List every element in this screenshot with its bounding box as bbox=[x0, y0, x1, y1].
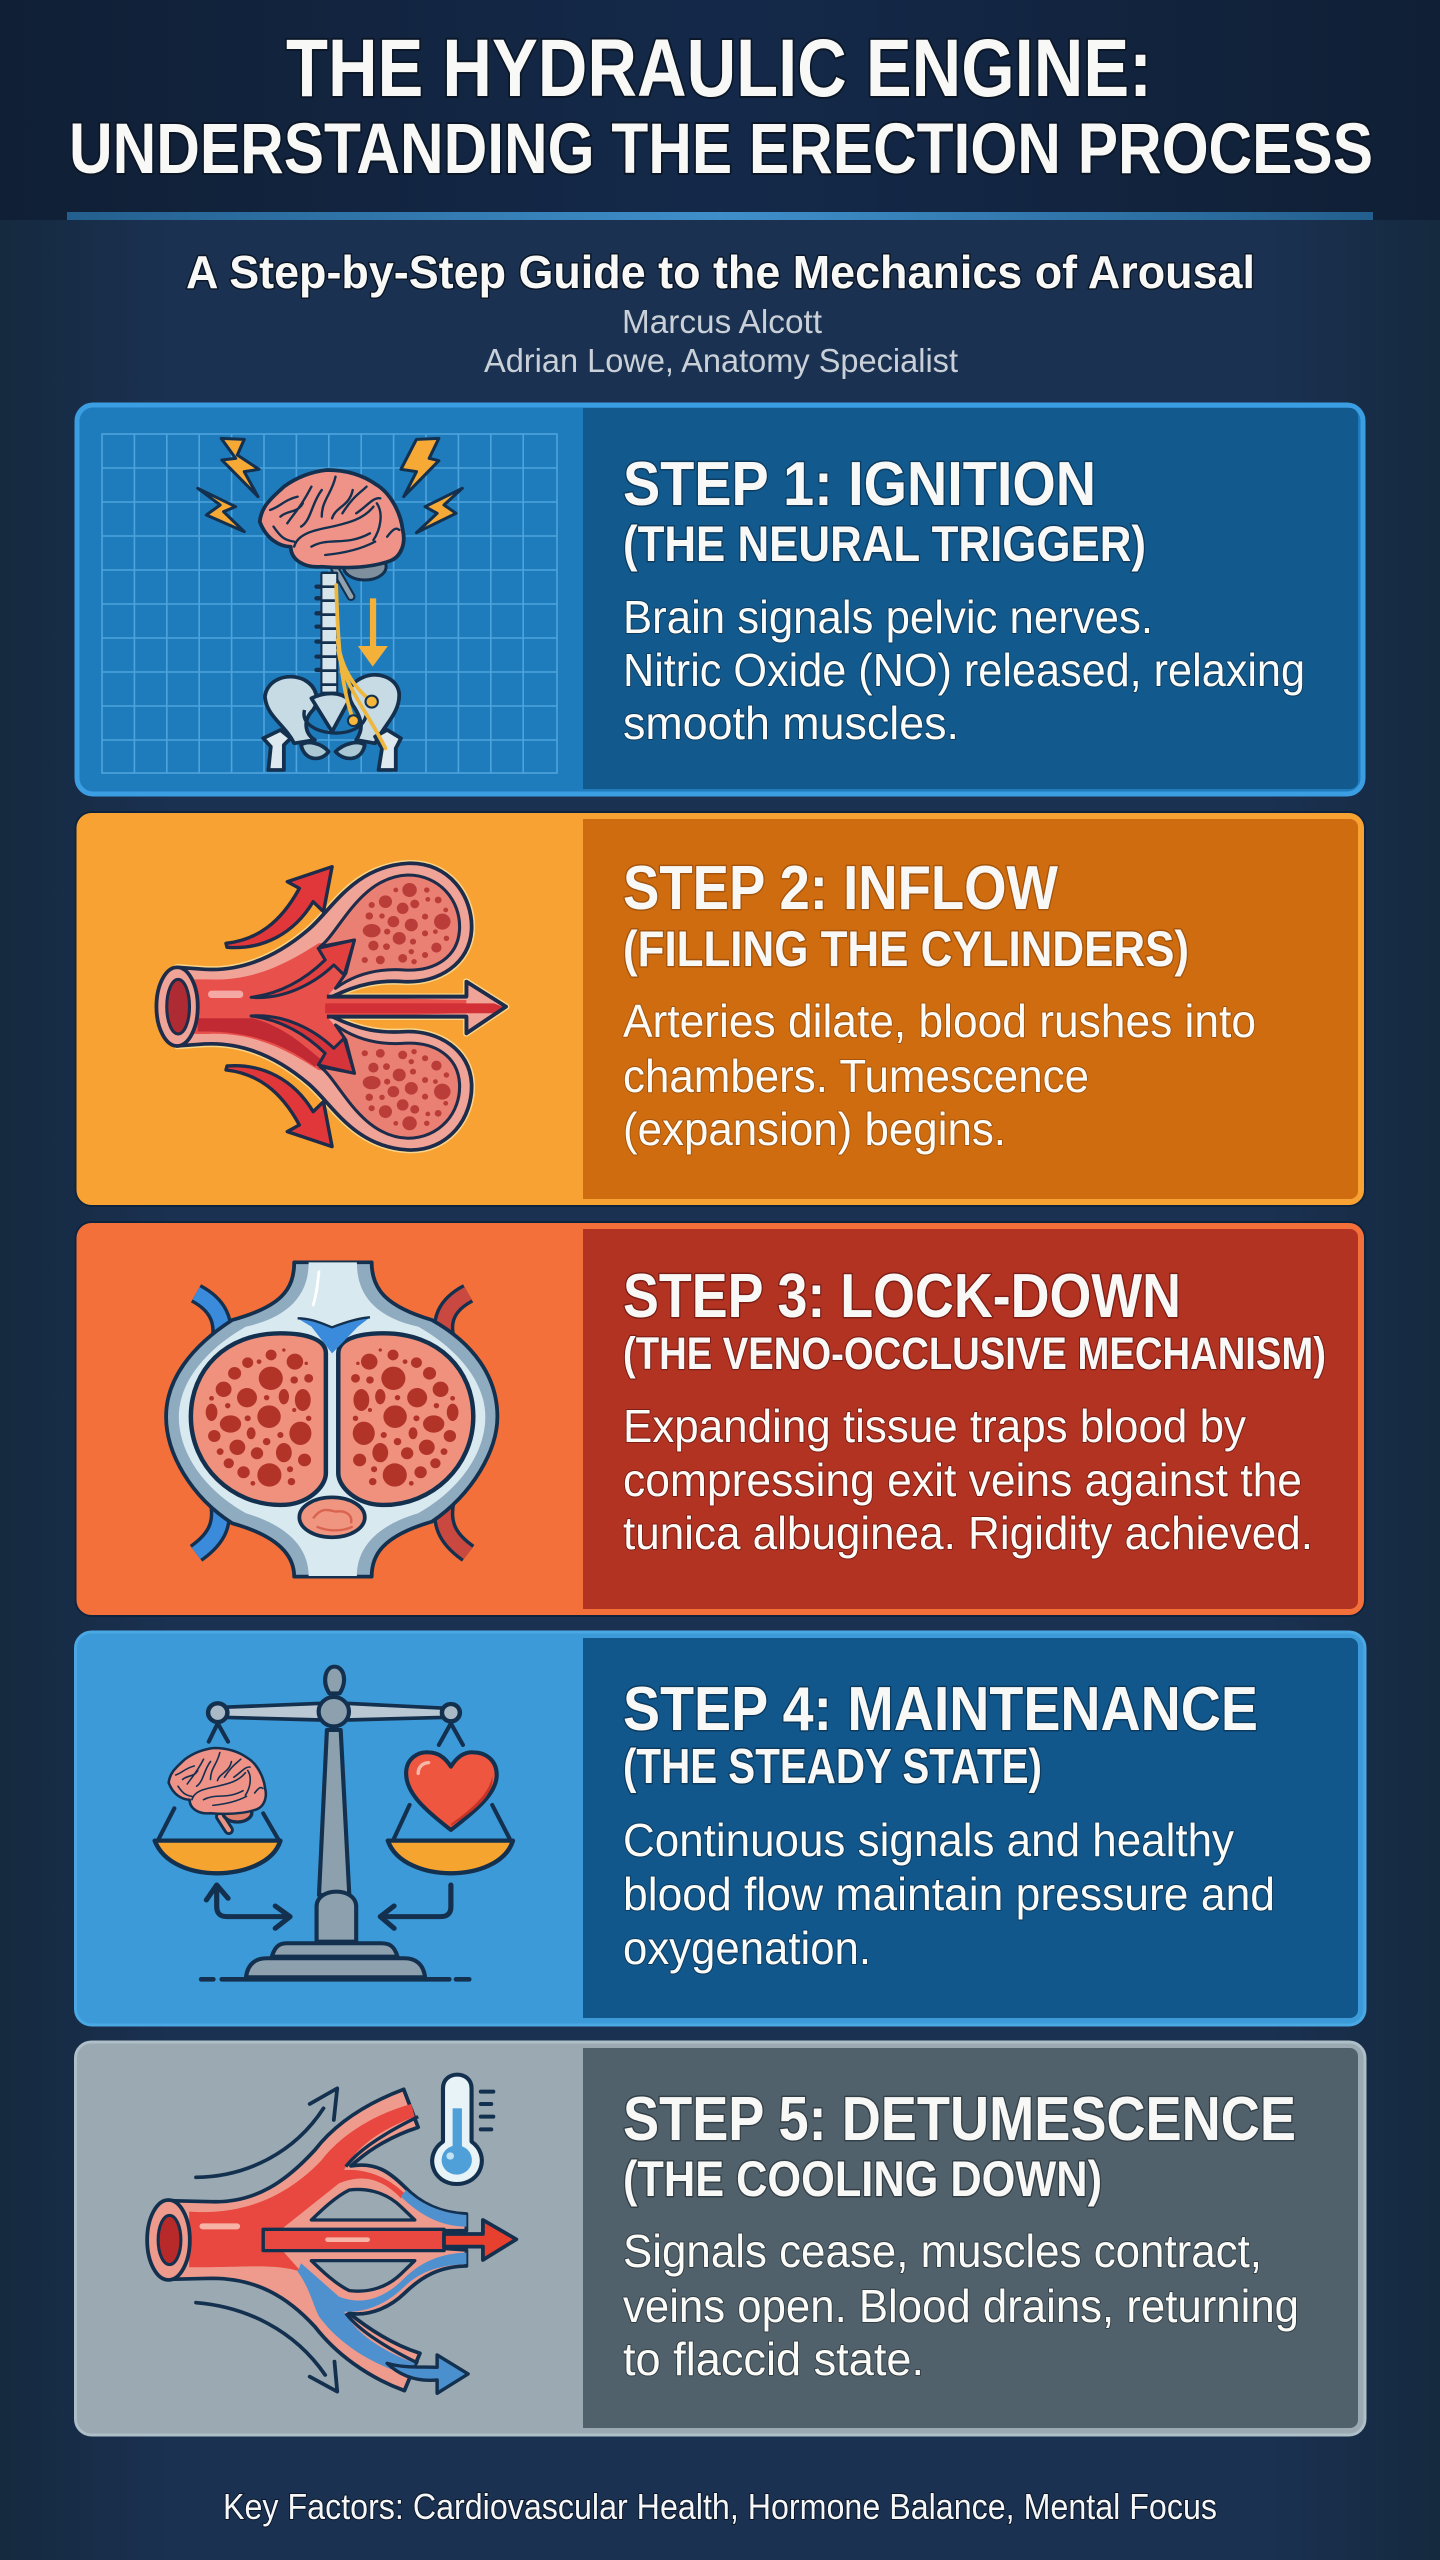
icon: heart bbox=[406, 1752, 497, 1830]
text: step 4 bbox=[623, 1675, 1275, 1974]
text: step 5 bbox=[623, 2085, 1299, 2385]
footer: key factors: Key Factors: Cardiovascular Health, Hormone Balance, Mental Focus bbox=[223, 2486, 1217, 2527]
vessel silhouette bbox=[170, 2089, 466, 2391]
pelvis bbox=[263, 675, 401, 770]
text: step 4: oxygenation. bbox=[623, 1922, 871, 1974]
text: step 4: Continuous signals and healthy bbox=[623, 1814, 1234, 1866]
red flow bbox=[189, 2104, 444, 2272]
text: step 5: veins open. Blood drains, returning bbox=[623, 2280, 1299, 2332]
vessel opening bbox=[156, 967, 198, 1046]
text: step 4: blood flow maintain pressure and bbox=[623, 1868, 1275, 1920]
text: step 3: compressing exit veins against the bbox=[623, 1454, 1302, 1506]
text: step 3: (THE VENO-OCCLUSIVE MECHANISM) bbox=[623, 1328, 1326, 1379]
panel: step 3 lock-down bbox=[76, 1222, 1365, 1616]
text: step 1: (THE NEURAL TRIGGER) bbox=[623, 516, 1146, 572]
scale stand bbox=[246, 1667, 425, 1977]
bulbs bbox=[320, 875, 460, 988]
authors bbox=[484, 303, 958, 379]
icon: balance scale with brain and heart bbox=[155, 1667, 513, 1979]
arrow: upper flow bbox=[226, 867, 332, 948]
blue flow bbox=[298, 2253, 466, 2376]
vessel opening bbox=[147, 2200, 190, 2280]
icon: brain, spine and pelvis bbox=[198, 438, 462, 770]
right chamber bbox=[338, 1333, 473, 1505]
text: step 1: Brain signals pelvic nerves. bbox=[623, 591, 1153, 643]
arrow: right feedback bbox=[380, 1885, 451, 1928]
arrow: lower curve bbox=[196, 2303, 337, 2392]
text: step 4: STEP 4: MAINTENANCE bbox=[623, 1675, 1258, 1744]
left chamber bbox=[191, 1333, 326, 1505]
icon: artery filling chambers bbox=[156, 863, 506, 1150]
authors: Adrian Lowe, Anatomy Specialist bbox=[484, 342, 958, 379]
panel: step 5 detumescence bbox=[76, 2042, 1365, 2435]
text: step 2: chambers. Tumescence bbox=[623, 1050, 1089, 1102]
text: step 2: Arteries dilate, blood rushes into bbox=[623, 995, 1256, 1047]
beam bbox=[222, 1703, 447, 1720]
text: step 2: (FILLING THE CYLINDERS) bbox=[623, 921, 1189, 977]
text: step 3: tunica albuginea. Rigidity achieved. bbox=[623, 1507, 1313, 1559]
text: step 4: (THE STEADY STATE) bbox=[623, 1740, 1042, 1794]
text: step 5: to flaccid state. bbox=[623, 2333, 924, 2385]
authors: Marcus Alcott bbox=[622, 303, 822, 340]
panel: step 4 maintenance bbox=[76, 1632, 1365, 2025]
text: step 2: (expansion) begins. bbox=[623, 1103, 1006, 1155]
text: step 2 bbox=[623, 854, 1256, 1155]
urethra bbox=[299, 1497, 365, 1537]
body wall bbox=[166, 1262, 497, 1577]
title bbox=[69, 23, 1373, 189]
top compressed vein bbox=[298, 1317, 370, 1353]
text: step 1 bbox=[623, 450, 1305, 749]
icon: vessels draining with thermometer bbox=[147, 2075, 516, 2393]
text: step 1: STEP 1: IGNITION bbox=[623, 450, 1096, 519]
outer silhouette bbox=[177, 863, 506, 1150]
blueprint grid bbox=[102, 434, 557, 773]
inner flow bbox=[194, 940, 466, 1073]
text: step 2: STEP 2: INFLOW bbox=[623, 854, 1058, 923]
arrow: left feedback bbox=[206, 1885, 290, 1928]
arrow: blue outflow bbox=[387, 2355, 468, 2393]
subtitle: A Step-by-Step Guide to the Mechanics of Arousal bbox=[186, 246, 1255, 298]
arrow: upper curve bbox=[196, 2088, 337, 2177]
text: step 1: smooth muscles. bbox=[623, 697, 959, 749]
panel: step 1 ignition bbox=[77, 405, 1363, 794]
text: step 5: STEP 5: DETUMESCENCE bbox=[623, 2085, 1296, 2154]
arrow: lower flow bbox=[226, 1066, 332, 1147]
text: step 3: STEP 3: LOCK-DOWN bbox=[623, 1262, 1181, 1331]
icon: cross-section of chambers bbox=[166, 1262, 497, 1577]
icon: small brain bbox=[169, 1748, 266, 1830]
text: step 5: Signals cease, muscles contract, bbox=[623, 2225, 1262, 2277]
title: THE HYDRAULIC ENGINE: bbox=[286, 23, 1152, 114]
icon: thermometer bbox=[432, 2075, 493, 2184]
panel: step 2 inflow bbox=[76, 812, 1365, 1206]
text: step 3 bbox=[623, 1262, 1326, 1559]
inner lines bbox=[346, 2117, 418, 2363]
veins bbox=[196, 1293, 468, 1553]
text: step 3: Expanding tissue traps blood by bbox=[623, 1400, 1246, 1452]
header band bbox=[0, 0, 1440, 220]
pans bbox=[155, 1841, 280, 1873]
text: step 5: (THE COOLING DOWN) bbox=[623, 2151, 1102, 2207]
arrow: signal down bbox=[358, 598, 388, 667]
arrow: red outflow bbox=[444, 2220, 516, 2260]
gaps between vessels bbox=[311, 2189, 415, 2220]
text: step 1: Nitric Oxide (NO) released, relaxing bbox=[623, 644, 1305, 696]
